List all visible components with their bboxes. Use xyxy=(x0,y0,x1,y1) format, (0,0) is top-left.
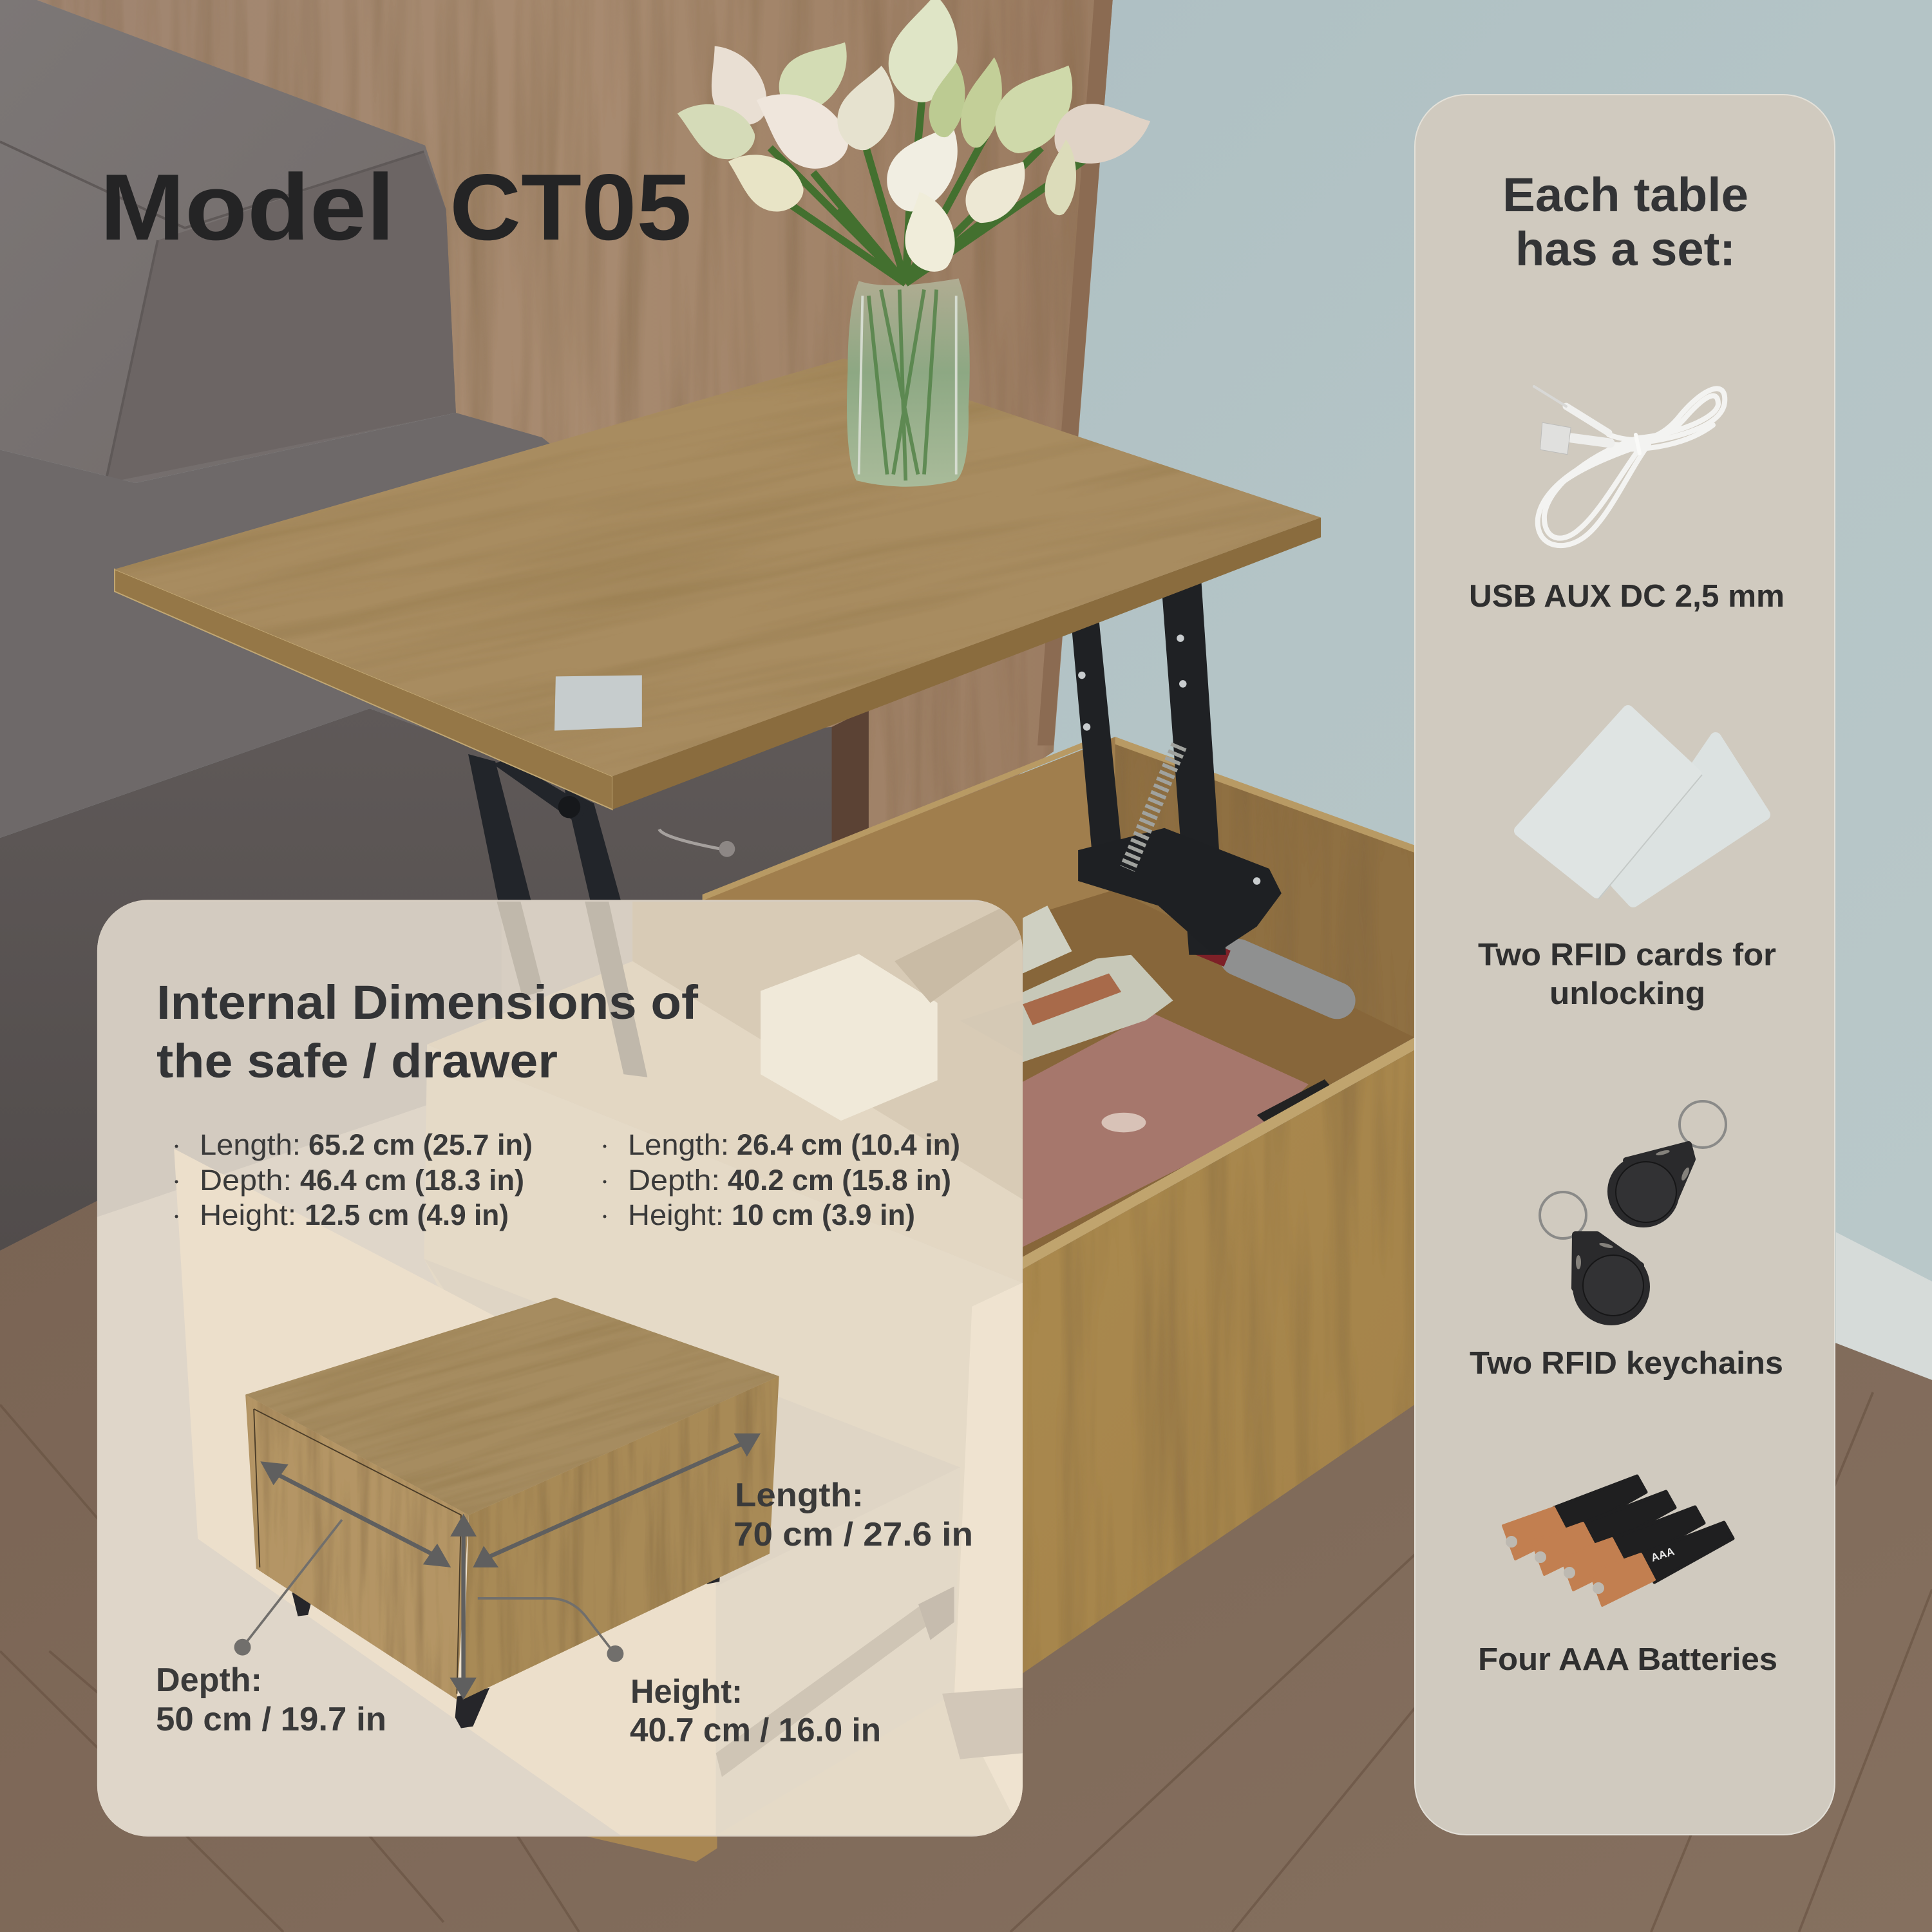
icon: rfid cards xyxy=(1520,711,1765,902)
panel background xyxy=(1415,95,1835,1835)
depth label xyxy=(156,1662,386,1738)
battery 1 xyxy=(1503,1476,1646,1559)
sofa seat xyxy=(0,413,641,838)
table box right face xyxy=(1023,1050,1414,1673)
sofa front xyxy=(0,708,831,1251)
drawer legs xyxy=(292,1577,720,1728)
icon: rfid keychains xyxy=(1540,1101,1726,1322)
safe dimensions list: 65.2 cm (25.7 in) xyxy=(308,1128,533,1161)
label: batteries: Four AAA Batteries xyxy=(1478,1642,1777,1677)
flower stems xyxy=(770,74,1084,283)
drawer dimensions list: Depth: xyxy=(628,1164,720,1197)
calla lily flowers xyxy=(668,0,1157,278)
drawer dimensions list: 10 cm (3.9 in) xyxy=(732,1198,915,1231)
fob lower slots xyxy=(1576,1242,1613,1269)
safe dimensions list: Depth: xyxy=(200,1164,292,1197)
fob upper slots xyxy=(1656,1149,1690,1182)
depth label: 50 cm / 19.7 in xyxy=(156,1701,386,1738)
title: CT05 xyxy=(450,155,692,260)
silver cylinder xyxy=(1198,946,1337,1001)
baseboard xyxy=(1836,1232,1932,1380)
panel heading xyxy=(156,976,698,1088)
drawer door outline xyxy=(254,1409,461,1694)
height pointer xyxy=(478,1598,623,1662)
panel heading: Internal Dimensions of xyxy=(156,976,698,1029)
dark gap behind table xyxy=(831,708,869,850)
icon: AAA batteries xyxy=(1503,1476,1733,1605)
wooden floor xyxy=(0,862,1932,1932)
depth pointer xyxy=(234,1520,342,1656)
battery 3 xyxy=(1561,1507,1704,1590)
drawer left face xyxy=(245,1395,469,1700)
depth arrow xyxy=(260,1461,451,1567)
panel heading: Each table xyxy=(1502,168,1748,222)
right lift bracket xyxy=(1072,582,1282,955)
drawer dimensions list: Height: xyxy=(628,1198,724,1231)
label: keychains: Two RFID keychains xyxy=(1470,1346,1783,1381)
box interior floor xyxy=(862,862,1414,1257)
laptop xyxy=(1023,1013,1333,1247)
fob lower xyxy=(1575,1235,1647,1322)
fob upper xyxy=(1611,1144,1692,1224)
left lift bracket xyxy=(468,754,622,905)
key ring upper xyxy=(1680,1101,1726,1148)
depth label: Depth: xyxy=(156,1662,262,1699)
height label xyxy=(630,1673,881,1749)
drawer right face xyxy=(463,1376,779,1700)
length arrow xyxy=(473,1434,761,1567)
label: rfid cards: Two RFID cards for xyxy=(1478,938,1776,972)
table box tip under panel xyxy=(579,1835,717,1862)
battery 2 xyxy=(1532,1492,1675,1575)
table box rim xyxy=(1023,1037,1414,1269)
white sensor square xyxy=(554,675,642,731)
panel background and ghosted table xyxy=(97,898,1026,1839)
panel right edge strip xyxy=(1037,0,1113,746)
height label: 40.7 cm / 16.0 in xyxy=(630,1712,881,1749)
title xyxy=(100,155,692,260)
label: rfid cards xyxy=(1478,938,1776,1011)
ghost box xyxy=(761,954,938,1121)
length label: Length: xyxy=(735,1477,864,1514)
safe dimensions list xyxy=(175,1128,533,1231)
drawer dimensions list: 40.2 cm (15.8 in) xyxy=(728,1164,951,1197)
drawer dimensions list xyxy=(603,1128,960,1231)
panel heading: has a set: xyxy=(1515,222,1736,276)
icon: usb aux cable xyxy=(1534,386,1725,545)
lift top edge xyxy=(115,518,1321,810)
length label xyxy=(734,1477,973,1553)
battery 4: AAA xyxy=(1649,1545,1676,1564)
banknote stacks xyxy=(961,905,1173,1062)
fob lower disc xyxy=(1583,1255,1643,1316)
title: Model xyxy=(100,155,395,260)
safe dimensions list: 12.5 cm (4.9 in) xyxy=(305,1198,509,1231)
panel heading: the safe / drawer xyxy=(156,1034,558,1088)
label: usb cable: USB AUX DC 2,5 mm xyxy=(1469,579,1785,614)
safe dimensions list: Length: xyxy=(200,1128,301,1161)
hook on sofa xyxy=(659,829,735,857)
panel: set contents xyxy=(1415,95,1835,1835)
fob upper disc xyxy=(1616,1162,1676,1222)
box interior back walls xyxy=(703,737,1414,1037)
ghost money xyxy=(895,902,1023,1003)
drawer top xyxy=(113,1109,914,1707)
ghost brackets xyxy=(497,902,647,1077)
safe dimensions list: 46.4 cm (18.3 in) xyxy=(300,1164,524,1197)
height arrow xyxy=(450,1514,477,1700)
label: rfid cards: unlocking xyxy=(1549,976,1705,1011)
drawer dimensions list: 26.4 cm (10.4 in) xyxy=(737,1128,960,1161)
drawer dimensions list: Length: xyxy=(628,1128,729,1161)
key ring lower xyxy=(1540,1192,1586,1238)
panel heading xyxy=(1502,168,1748,276)
vase with stems xyxy=(847,278,970,487)
lift top surface xyxy=(115,359,1321,777)
wood wall panel xyxy=(37,0,1113,862)
battery 4 xyxy=(1590,1522,1733,1605)
panel: internal dimensions xyxy=(97,898,1026,1839)
length label: 70 cm / 27.6 in xyxy=(734,1516,973,1553)
safe dimensions list: Height: xyxy=(200,1198,296,1231)
height label: Height: xyxy=(630,1673,743,1710)
sofa armrest xyxy=(0,0,456,483)
